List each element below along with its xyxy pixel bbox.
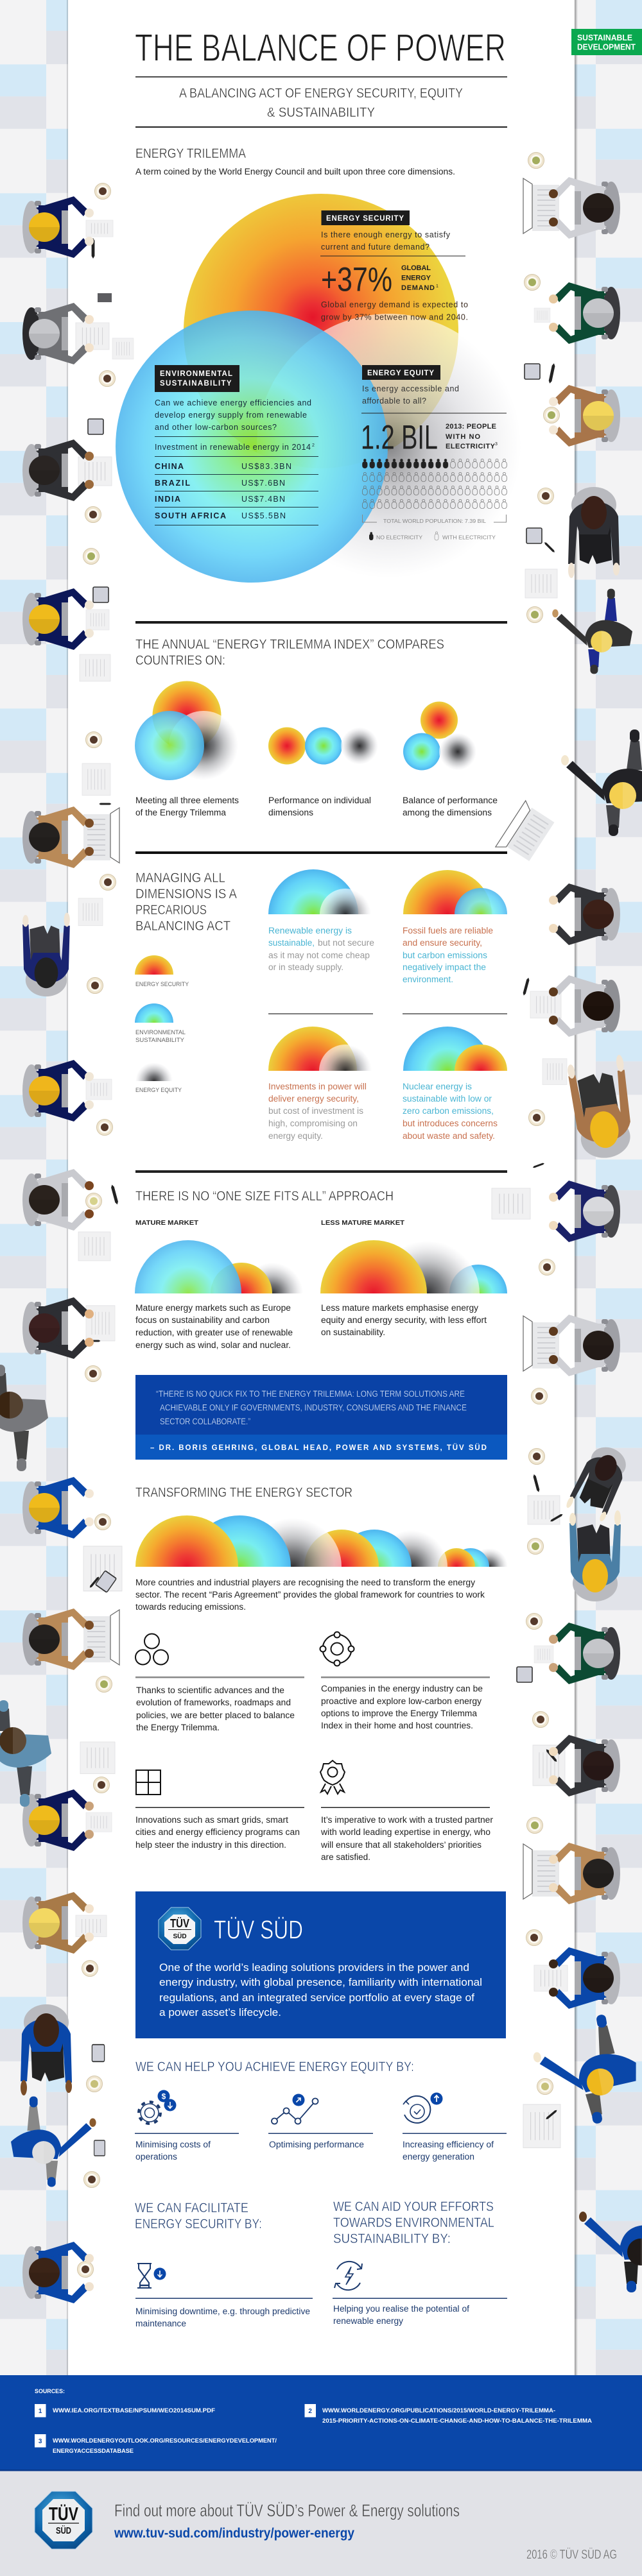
logo: TÜV SÜD small: TÜV [170,1917,189,1930]
text: nuclear: sustainable with low or [403,1094,492,1104]
text: optimising performance: Optimising performance [269,2140,364,2149]
heading: help with energy equity: WE CAN HELP YOU ACHIEVE ENERGY EQUITY BY: [135,2060,414,2074]
logo: TÜV SÜD small [159,1907,201,1950]
legend: energy security: ENERGY SECURITY [135,981,189,988]
dome: mature market [135,1240,300,1293]
investment table: US$5.5BN [241,511,286,520]
caption: meeting all three [135,796,239,817]
text: about body: energy industry, with global presence, familiarity with international [159,1977,482,1988]
heading: aid environmental sustainability: SUSTAINABILITY BY: [333,2231,451,2246]
text: renewable potential: renewable energy [333,2316,403,2326]
text: nuclear [403,1082,498,1141]
coffee cups right [524,153,560,2094]
title: THE BALANCE OF POWER [135,26,506,69]
caption: individual dimensions: dimensions [268,808,313,817]
dome: fossil fuels [403,870,507,914]
energy security text: 1 [436,284,438,289]
coffee cups left [77,183,116,2278]
text: mature market: reduction, with greater use of renewable [135,1328,293,1337]
text: mature market: Mature energy markets such as Europe [135,1303,291,1313]
icon: efficiency clock [403,2093,443,2123]
text: fossil fuels: Fossil fuels are reliable [403,926,493,935]
environmental sustainability text: and other low-carbon sources? [155,423,277,432]
text: minimising costs: operations [135,2152,177,2162]
text: transforming intro [135,1578,485,1612]
text: trusted partner: with world leading expertise in energy, who [320,1827,490,1837]
panel: TÜV SÜD about [135,1891,506,2038]
heading: transforming: TRANSFORMING THE ENERGY SECTOR [135,1485,352,1500]
standing people, right side [528,487,642,2292]
callout: quote: – DR. BORIS GEHRING, GLOBAL HEAD, POWER AND SYSTEMS, TÜV SÜD [150,1444,487,1452]
dome: less mature market [320,1240,507,1293]
seated people, left side [22,196,94,2303]
text: transforming intro: More countries and industrial players are recognising the need to transform the energy [135,1578,475,1587]
text: investments [268,1082,367,1141]
callout: quote: “THERE IS NO QUICK FIX TO THE ENERGY TRILEMMA: LONG TERM SOLUTIONS ARE [156,1389,465,1399]
text: innovations: cities and energy efficiency programs can [135,1827,300,1837]
legend: energy security [135,955,189,986]
text: minimising downtime [135,2307,310,2328]
energy security text: ENERGY [401,275,431,282]
logo: TÜV SÜD large [35,2491,92,2549]
text: scientific advances [136,1685,295,1732]
papers and devices on the desk [76,178,568,2156]
text: nuclear: about waste and safety. [403,1131,495,1141]
text: renewable: Renewable energy is [268,926,352,935]
icon: gear with coin [139,2090,176,2124]
source 1: WWW.IEA.ORG/TEXTBASE/NPSUM/WEO2014SUM.PDF [53,2407,215,2414]
text: website url: www.tuv-sud.com/industry/power-energy [114,2526,354,2541]
energy equity text: ELECTRICITY [446,443,496,450]
icon: performance line [272,2094,318,2124]
text: trusted partner: are satisfied. [321,1852,370,1862]
environmental sustainability text: develop energy supply from renewable [155,411,307,420]
text: innovations: help steer the industry in this direction. [135,1840,286,1850]
text: about body [159,1962,482,2018]
text: companies: Index in their home and host countries. [321,1721,473,1730]
heading: TÜV SÜD: TÜV SÜD [214,1915,303,1944]
text: about body: One of the world’s leading solutions providers in the power and [159,1962,469,1974]
energy equity text: 1.2 BIL [361,418,438,457]
investment table: US$7.6BN [241,479,285,488]
text: find out more: Find out more about TÜV SÜD’s Power & Energy solutions [114,2501,460,2520]
chart: trilemma venn diagram [116,194,521,583]
section: energy equity services [135,2060,507,2162]
energy equity text: 3 [495,442,498,447]
icon: rosette [320,1761,345,1794]
callout: quote: ACHIEVABLE ONLY IF GOVERNMENTS, INDUSTRY, CONSUMERS AND THE FINANCE [160,1403,467,1413]
source 3: ENERGYACCESSDATABASE [53,2448,134,2455]
dome: renewable [268,869,369,914]
energy equity text [361,365,508,540]
icon: three circles [135,1633,168,1664]
text: investments: but cost of investment is [268,1106,363,1116]
text: companies: options to improve the Energy Trilemma [321,1709,477,1718]
text: renewable: but not secure [318,938,374,948]
energy security text: ENERGY SECURITY [326,215,404,223]
text: mature market: focus on sustainability and carbon [135,1315,270,1325]
text: minimising costs [135,2140,211,2162]
heading: balancing act: DIMENSIONS IS A [135,887,237,901]
source 3: WWW.WORLDENERGYOUTLOOK.ORG/RESOURCES/ENERGYDEVELOPMENT/ [53,2437,277,2444]
icon: hourglass [137,2264,166,2288]
diagram: meeting all three [135,681,238,780]
text: renewable: sustainable, [268,938,315,948]
legend: environmental sustainability [135,1003,186,1044]
environmental sustainability text: Can we achieve energy efficiencies and [155,398,311,407]
chart: shrinking domes [135,1515,506,1567]
badge: sustainable development: SUSTAINABLE [577,33,632,42]
text: scientific advances: the Energy Trilemma. [136,1723,220,1732]
energy security text: GLOBAL [401,264,431,272]
callout: quote [135,1375,507,1460]
environmental sustainability text: 2 [312,443,315,448]
environmental sustainability text: SUSTAINABILITY [160,380,232,388]
legend: environmental sustainability: ENVIRONMENTAL [135,1029,186,1036]
legend: energy equity: ENERGY EQUITY [135,1087,182,1094]
energy equity text: 2013: PEOPLE [446,423,496,431]
icon: orbit [320,1632,354,1666]
text: less mature market [321,1303,487,1337]
section: environmental sustainability services [333,2199,507,2326]
energy security text: DEMAND [401,284,435,292]
section heading: energy trilemma: ENERGY TRILEMMA [135,146,246,161]
energy equity text: TOTAL WORLD POPULATION: 7.39 BIL [383,518,486,524]
investment table: SOUTH AFRICA [155,511,226,520]
heading: balancing act: PRECARIOUS [135,903,207,917]
investment table: BRAZIL [155,479,190,488]
text: less mature market: on sustainability. [321,1327,385,1337]
text: transforming intro: sector. The recent “Paris Agreement” provides the global framework for countries to work [135,1590,485,1599]
pictogram legend: WITH ELECTRICITY [442,534,496,540]
energy equity text: ENERGY EQUITY [367,370,434,377]
logo: TÜV SÜD large: TÜV [49,2503,79,2525]
section: one size fits all [135,1170,507,1350]
energy security text: current and future demand? [321,243,429,252]
heading: annual index: THE ANNUAL “ENERGY TRILEMMA INDEX” COMPARES [135,637,444,652]
text: trusted partner: will ensure that all stakeholders’ priorities [320,1840,482,1850]
investment table: US$7.4BN [241,495,285,504]
panel: white content sheet [66,0,578,2375]
text: companies: proactive and explore low-carbon energy [321,1696,482,1706]
text: nuclear: but introduces concerns [403,1119,498,1128]
investment table [155,462,318,525]
text: renewable [268,926,374,972]
caption: individual dimensions [268,796,371,817]
text: renewable potential: Helping you realise the potential of [333,2304,469,2314]
dome: nuclear [403,1027,507,1071]
source 2: WWW.WORLDENERGY.ORG/PUBLICATIONS/2015/WORLD-ENERGY-TRILEMMA- [322,2407,555,2414]
energy equity text: Is energy accessible and [362,384,459,393]
section heading: energy trilemma [135,146,455,176]
text: companies: Companies in the energy industry can be [321,1684,483,1694]
subtitle: A BALANCING ACT OF ENERGY SECURITY, EQUITY [179,86,463,101]
heading: balancing act: MANAGING ALL [135,871,225,885]
badge: sustainable development [571,29,642,55]
heading: no one size: THERE IS NO “ONE SIZE FITS ALL” APPROACH [135,1189,394,1204]
heading: facilitate energy security: WE CAN FACILITATE [135,2201,248,2215]
text: less mature market: equity and energy security, with less effort [321,1315,487,1325]
subtitle: & SUSTAINABILITY [267,105,375,120]
text: investments: high, compromising on [268,1119,358,1128]
text: mature market [135,1303,293,1350]
footer: call to action [0,2471,642,2576]
environmental sustainability text [155,365,318,525]
dome: investments [268,1027,370,1071]
environmental sustainability text: Investment in renewable energy in 2014 [155,443,311,452]
text: minimising costs: Minimising costs of [135,2140,211,2149]
caption: balance among dimensions [403,796,498,817]
energy equity text: WITH NO [446,433,480,441]
footer: sources [0,2375,642,2471]
source 1: 1 [39,2408,42,2415]
source 3 [35,2434,277,2455]
logo: TÜV SÜD large: SÜD [56,2525,71,2536]
subtitle [135,76,507,128]
population pictogram [361,459,508,509]
text: nuclear: Nuclear energy is [403,1082,472,1091]
text: minimising downtime: Minimising downtime, e.g. through predictive [135,2307,310,2316]
text: trusted partner [320,1815,494,1862]
caption: balance among dimensions: Balance of performance [403,796,498,805]
source 2 [304,2404,592,2425]
text: renewable potential [333,2304,469,2326]
text: innovations: Innovations such as smart grids, smart [135,1815,288,1825]
section heading: energy trilemma: A term coined by the World Energy Council and built upon three core dimensions. [135,167,455,176]
legend: energy equity [136,1064,182,1093]
source 2: 2015-PRIORITY-ACTIONS-ON-CLIMATE-CHANGE-AND-HOW-TO-BALANCE-THE-TRILEMMA [322,2418,592,2425]
label: mature market: MATURE MARKET [135,1219,199,1227]
text: increasing efficiency: energy generation [403,2152,474,2162]
heading: aid environmental sustainability: TOWARDS ENVIRONMENTAL [333,2215,494,2230]
caption: meeting all three: of the Energy Trilemma [135,808,226,817]
energy security text: Global energy demand is expected to [321,300,468,309]
heading: facilitate energy security [135,2201,262,2231]
investment table: CHINA [155,462,184,471]
text: increasing efficiency: Increasing efficiency of [403,2140,494,2149]
source 3: 3 [39,2438,42,2445]
text: mature market: energy such as wind, solar and nuclear. [135,1340,291,1350]
text: scientific advances: evolution of frameworks, roadmaps and [136,1698,291,1707]
energy security text: +37% [321,260,392,299]
section: trilemma index [135,621,507,817]
text: about body: regulations, and an integrated service portfolio at every stage of [159,1992,474,2004]
text: renewable: as it may not come cheap [268,951,370,960]
energy security text: grow by 37% between now and 2040. [321,313,468,322]
text: renewable: or in steady supply. [268,962,343,972]
source 2: 2 [308,2408,312,2415]
text: fossil fuels [403,926,493,984]
text: innovations [135,1815,300,1850]
section: transforming the energy sector [135,1485,508,1862]
heading: balancing act: BALANCING ACT [135,919,230,934]
heading: facilitate energy security: ENERGY SECURITY BY: [135,2217,262,2231]
text: minimising downtime: maintenance [135,2319,186,2328]
text: investments: deliver energy security, [268,1094,359,1104]
text: investments: energy equity. [268,1131,323,1141]
text: scientific advances: policies, we are better placed to balance [136,1710,295,1720]
icon: window grid [136,1770,160,1795]
caption: meeting all three: Meeting all three elements [135,796,239,805]
seated people, right side [549,177,620,2009]
text: trusted partner: It’s imperative to work with a trusted partner [321,1815,494,1825]
text: fossil fuels: environment. [403,975,453,984]
heading: aid environmental sustainability [333,2199,494,2246]
badge: sustainable development: DEVELOPMENT [577,42,636,51]
investment table: US$83.3BN [241,462,291,471]
heading: annual index [135,637,444,668]
label: less mature market: LESS MATURE MARKET [321,1219,405,1227]
text: about body: a power asset’s lifecycle. [159,2007,281,2018]
section: managing all dimensions [135,851,507,1141]
text: increasing efficiency [403,2140,494,2162]
energy equity text: affordable to all? [362,397,426,405]
diagram: balance among dimensions [403,702,476,770]
investment table: INDIA [155,495,180,504]
icon: renewable energy cycle [334,2262,362,2290]
text: nuclear: zero carbon emissions, [403,1106,494,1116]
text: transforming intro: towards reducing emissions. [135,1602,246,1612]
text: fossil fuels: and ensure security, [403,938,482,948]
text: scientific advances: Thanks to scientific advances and the [136,1685,284,1695]
logo: TÜV SÜD small: SÜD [173,1932,187,1940]
caption: balance among dimensions: among the dimensions [403,808,492,817]
icon: gear with coin: $ [162,2092,166,2101]
standing people, left side [0,912,96,2187]
text: fossil fuels: but carbon emissions [403,951,487,960]
section: energy security services [135,2201,313,2328]
text: companies [321,1684,483,1730]
text: fossil fuels: negatively impact the [403,962,486,972]
pictogram legend [369,532,496,540]
heading: aid environmental sustainability: WE CAN AID YOUR EFFORTS [333,2199,494,2214]
energy security text: Is there enough energy to satisfy [321,230,451,239]
heading: annual index: COUNTRIES ON: [135,653,225,668]
caption: individual dimensions: Performance on individual [268,796,371,805]
heading: balancing act [135,871,237,934]
source 1 [35,2404,215,2418]
legend: environmental sustainability: SUSTAINABILITY [135,1037,185,1044]
text: investments: Investments in power will [268,1082,367,1091]
callout: quote: SECTOR COLLABORATE.” [160,1417,250,1426]
energy security text [320,210,468,322]
environmental sustainability text: ENVIRONMENTAL [160,370,232,378]
pictogram legend: NO ELECTRICITY [376,534,422,540]
diagram: individual dimensions [268,728,378,765]
footer: sources: SOURCES: [35,2388,65,2395]
text: less mature market: Less mature markets emphasise energy [321,1303,478,1313]
